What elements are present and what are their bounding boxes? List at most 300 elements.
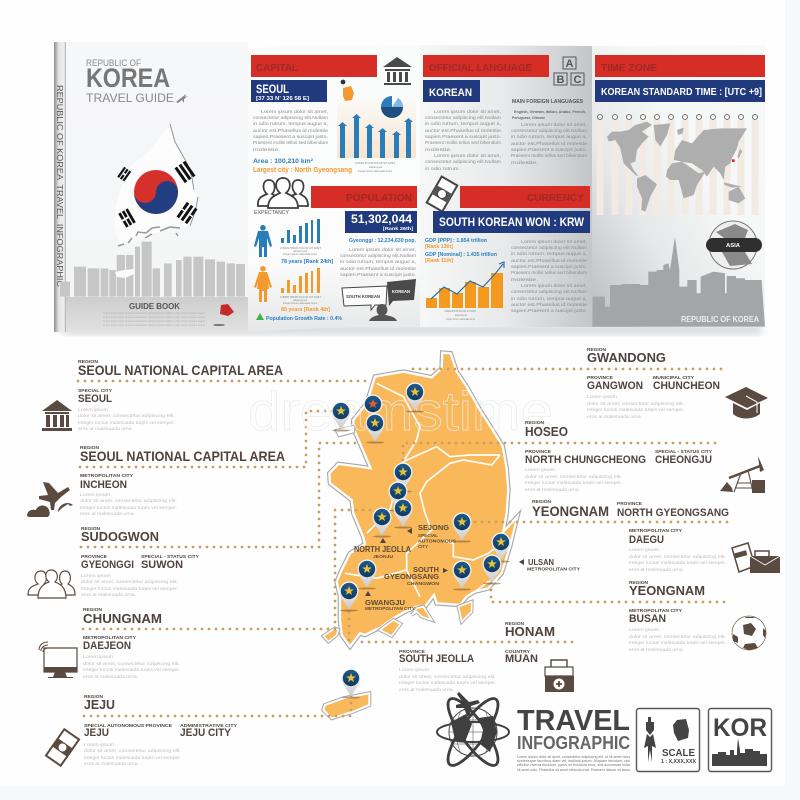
region heading: REGION (629, 580, 649, 586)
county heading: COUNTRY (505, 649, 531, 655)
capital facts: Area : 100,210 km² (253, 158, 314, 165)
Sejong label: CITY (418, 544, 429, 550)
icon: bank (42, 400, 72, 431)
province heading: SPECIAL AUTONOMOUS PROVINCE (84, 723, 173, 729)
book shadow (62, 326, 762, 334)
GDP figures: GDP [PPP] : 1.854 trillion (425, 238, 487, 244)
left column: Seoul capital area (78, 359, 283, 431)
icon: oil pump (720, 456, 765, 493)
orange chart caption (280, 295, 321, 305)
Gwangju label: METROPOLITAN CITY (365, 606, 415, 611)
right column: North Chungcheong (525, 420, 713, 492)
description: eros at malesuada urna. (525, 487, 580, 492)
region heading: REGION (81, 526, 101, 532)
currency paragraph: auctor est.Phasellus id molestie (511, 258, 588, 263)
capital name box (251, 80, 327, 102)
city heading: DAEJEON (83, 640, 131, 652)
page sheet (592, 45, 765, 327)
page: time zone (592, 45, 765, 327)
foreign language paragraph: in odio rutrum, tempus augue a, (511, 134, 587, 139)
Korea silhouette (673, 719, 689, 741)
spine (54, 42, 66, 332)
icon: airplane over clouds (27, 482, 73, 517)
female life expectancy (254, 266, 330, 313)
currency paragraph: sapien.Praesent a suscipit justo. (511, 264, 587, 269)
right column: Busan (629, 580, 726, 652)
GDP chart caption: LOREM IPSUM DOLOR SIT AMET (444, 309, 476, 313)
Sejong label: AUTONOMOUS (418, 538, 457, 544)
description (587, 394, 684, 419)
scale box (636, 708, 700, 772)
blue chart caption (280, 246, 321, 256)
guide book label: GUIDE BOOK (129, 302, 180, 311)
country footer label: REPUBLIC OF KOREA (681, 315, 759, 324)
city heading: BUSAN (629, 613, 666, 625)
province heading: PROVINCE (399, 649, 426, 655)
province heading: PROVINCE (587, 375, 614, 381)
cover title: TRAVEL GUIDE (86, 91, 174, 105)
foreign language paragraph: molestie. (511, 160, 538, 165)
description: Lorem ipsum (587, 394, 617, 399)
region heading: REGION (78, 359, 99, 365)
city heading: CHEONGJU (655, 454, 712, 466)
region heading: REGION (505, 621, 525, 627)
population paragraph: sapien.Praesent a suscipit justo. (340, 272, 416, 277)
GDP figures: GDP [Nominal] : 1.435 trillion (425, 252, 497, 258)
description (629, 627, 726, 652)
chart caption (355, 161, 395, 173)
foreign language paragraph: sapien.Praesent a suscipit justo. (511, 147, 587, 152)
province heading (587, 375, 643, 392)
city heading: SPECIAL - STATUS CITY (655, 449, 713, 455)
description: dolor sit amet, consectetur adipiscing elit. (399, 674, 496, 679)
male value: 78 years [Rank 24th] (281, 259, 333, 265)
description: Integer luctus malesuada turpis vel semper. (78, 420, 175, 425)
city heading (80, 473, 134, 491)
title small print: scelerisque faucibus diam vel, facilisis ipsum. Aliquam tincidunt, nisl (517, 759, 630, 763)
province heading: GANGWON (587, 380, 643, 392)
globe land (451, 714, 497, 752)
city heading: JEJU CITY (180, 727, 232, 739)
currency paragraph (511, 239, 588, 313)
province heading: SOUTH JEOLLA (399, 653, 474, 665)
foreign languages (512, 99, 586, 120)
icon: alphabet blocks: A (566, 58, 574, 70)
province heading: JEJU (84, 727, 109, 739)
province heading: PROVINCE (617, 501, 643, 507)
city heading: MUNICIPAL CITY (653, 375, 695, 381)
currency paragraph: auctor est.Phasellus id molestie (511, 302, 588, 307)
left column: Daejeon (83, 607, 180, 679)
capital paragraph: sapien.Praesent a suscipit justo. (253, 134, 328, 139)
spine title: REPUBLIC OF KOREA TRAVEL INFOGRAPHIC (55, 85, 65, 287)
capital paragraph: auctor est.Phasellus id molestie (253, 128, 329, 133)
bottom centre: South Jeolla (399, 649, 496, 692)
region heading: REGION (84, 694, 104, 700)
Gwangju label (365, 591, 415, 611)
travel infographic title: TRAVEL (517, 705, 630, 737)
province heading: PROVINCE (525, 449, 552, 455)
trend arrow (431, 264, 503, 299)
icon: compass (644, 717, 656, 762)
title small print (517, 755, 630, 772)
blue bars (281, 219, 320, 243)
city heading (141, 554, 200, 571)
foreign language paragraph: auctor est.Phasellus id molestie (511, 141, 588, 146)
GDP figures: [Rank 13th] (425, 244, 453, 250)
city heading: SUWON (141, 559, 183, 571)
language paragraph: consectetur adipiscing elit.Nullam (425, 115, 501, 120)
Asia label: ASIA (726, 243, 740, 249)
region heading: SEOUL NATIONAL CAPITAL AREA (80, 448, 285, 464)
time zone box (595, 80, 765, 102)
description: dolor sit amet, consectetur adipiscing elit. (629, 554, 726, 559)
travel infographic title: INFOGRAPHIC (517, 733, 630, 753)
currency paragraph: consectetur adipiscing elit.Nullam (511, 289, 587, 294)
city heading (655, 449, 713, 466)
description: Integer luctus malesuada turpis vel semper. (629, 640, 726, 645)
description (78, 407, 175, 431)
language paragraph: molestie. (425, 147, 452, 152)
description: eros at malesuada urna. (80, 511, 135, 516)
population paragraph: auctor est.Phasellus id molestie (340, 266, 417, 271)
region heading: REGION (83, 607, 103, 613)
city heading (629, 528, 683, 546)
North Jeolla label: JEONJU (373, 554, 393, 559)
book cover (54, 42, 248, 332)
cover small print (103, 311, 205, 327)
icon: orange person (254, 266, 272, 302)
province heading: NORTH GYEONGSANG (617, 507, 729, 519)
foreign languages: MAIN FOREIGN LANGUAGES (512, 99, 584, 105)
time zone box: KOREAN STANDARD TIME : [UTC +9] (601, 86, 762, 98)
plane (456, 692, 480, 716)
county heading: MUAN (505, 653, 538, 665)
icon: alphabet blocks: B (556, 74, 564, 86)
region heading: REGION (80, 445, 100, 451)
description: Integer luctus malesuada turpis vel semper. (525, 480, 622, 485)
icon: globe with orbiting planes (437, 692, 509, 772)
region heading: HONAM (505, 624, 555, 639)
bubble: korean: KOREAN (392, 289, 410, 294)
orange bars (281, 268, 320, 293)
South Gyeongsang label (384, 565, 448, 586)
Ulsan label: ULSAN (528, 558, 554, 567)
page sheet (248, 45, 420, 332)
city heading: METROPOLITAN CITY (80, 473, 134, 479)
chart caption: adipiscing elit (369, 165, 382, 169)
mini skyline (712, 738, 767, 766)
population value box (345, 211, 417, 233)
GDP chart caption (444, 309, 476, 321)
blue chart caption: adipiscing elit (293, 249, 307, 253)
time zone stripes (600, 120, 755, 215)
foreign language paragraph: Praesent mollis tellus sed bibendum (511, 153, 587, 158)
skyline (593, 237, 765, 327)
population value box: 51,302,044 (351, 212, 412, 226)
flag map of Korea (114, 124, 198, 246)
city heading (629, 608, 683, 625)
GDP chart caption: Integer luctus malesuada turpis (446, 317, 475, 321)
language paragraph: Praesent mollis tellus sed bibendum (425, 140, 501, 145)
travel infographic title (517, 705, 630, 772)
province heading: GYEONGGI (81, 559, 134, 571)
foreign language paragraph: Lorem ipsum dolor sit amet, (521, 122, 587, 127)
cover small print: Lorem ipsum dolor sit amet consectetur adipiscing elit nullam in odio rutrum tempus augue (103, 323, 205, 327)
language box (423, 80, 480, 102)
region heading: REGION (532, 499, 552, 505)
Sejong label (407, 523, 457, 550)
city heading (83, 635, 137, 652)
description: dolor sit amet, consectetur adipiscing elit. (83, 661, 180, 666)
capital paragraph: Lorem ipsum dolor sit amet, (261, 109, 328, 114)
city heading (78, 388, 113, 405)
trigrams (117, 161, 197, 228)
city heading: METROPOLITAN CITY (629, 608, 683, 614)
capital paragraph: Praesent mollis tellus sed bibendum (253, 140, 328, 145)
icon: blue person (254, 225, 272, 257)
icon: red location flag (213, 304, 234, 326)
city heading: METROPOLITAN CITY (83, 635, 137, 641)
currency box: SOUTH KOREAN WON : KRW (439, 215, 585, 229)
Ulsan label (519, 558, 581, 572)
description: Integer luctus malesuada turpis vel semper. (83, 667, 180, 672)
largest province: Gyeonggi : 12,234,630 pop. (349, 238, 416, 244)
left column: Incheon (80, 445, 285, 516)
population growth (256, 313, 342, 322)
capital pin with red star (364, 394, 382, 414)
cover title: REPUBLIC OF (86, 58, 141, 68)
city heading: CHUNCHEON (653, 380, 720, 392)
icon: banknote (46, 729, 79, 766)
description: dolor sit amet, consectetur adipiscing elit. (81, 579, 178, 584)
population paragraph: consectetur adipiscing elit.Nullam (340, 253, 416, 258)
region heading: CHUNGNAM (83, 611, 162, 626)
population header: POPULATION (346, 192, 412, 204)
mainland (329, 353, 517, 647)
North Jeolla label: NORTH JEOLLA (354, 545, 411, 554)
right column: Daegu (532, 499, 729, 572)
population growth: Population Growth Rate : 0.4% (266, 316, 342, 322)
title small print: Lorem ipsum dolor sit amet, consectetur adipiscing elit, ut sit amet risus (517, 755, 630, 759)
country code box: KOR (713, 714, 767, 742)
description: Integer luctus malesuada turpis vel semper. (399, 680, 496, 685)
description: Lorem ipsum (80, 492, 110, 497)
region heading: REGION (525, 420, 545, 426)
description (525, 467, 622, 492)
currency paragraph: consectetur adipiscing elit.Nullam (511, 245, 587, 250)
scale label: SCALE (662, 748, 695, 759)
city heading: ADMINISTRATIVE CITY (180, 723, 238, 729)
icon: people (28, 570, 75, 598)
language paragraph (425, 109, 502, 171)
page sheet (420, 45, 592, 327)
description: Integer luctus malesuada turpis vel semper. (80, 505, 177, 510)
province heading (617, 501, 729, 519)
region heading: GWANDONG (587, 350, 666, 365)
bottom centre: Muan (505, 621, 555, 665)
description: Integer luctus malesuada turpis vel semper. (81, 586, 178, 591)
capital paragraph (253, 109, 329, 152)
capital name box: [37 33 N' 126 58 E] (256, 96, 309, 102)
page: language and currency (420, 45, 592, 327)
province heading: NORTH CHUNGCHEONG (525, 454, 646, 466)
description: dolor sit amet, consectetur adipiscing elit. (84, 748, 181, 753)
globe land (716, 224, 752, 266)
GDP figures: [Rank 11th] (425, 258, 453, 264)
cover footer (66, 297, 248, 332)
province heading (84, 723, 173, 739)
province heading: PROVINCE (81, 554, 108, 560)
speech bubbles (342, 279, 416, 321)
scale box: 1 : X,XXX,XXX (661, 759, 697, 765)
Sejong label: SEJONG (418, 523, 449, 532)
cover small print: Lorem ipsum dolor sit amet consectetur adipiscing elit nullam in odio rutrum tempus augue (103, 311, 205, 315)
country code box (708, 708, 772, 772)
connector dotted lines (78, 369, 730, 716)
city heading: METROPOLITAN CITY (629, 528, 683, 534)
description: dolor sit amet, consectetur adipiscing elit. (587, 401, 684, 406)
South Gyeongsang label: SOUTH (413, 565, 439, 574)
currency paragraph: sapien.Praesent a suscipit justo. (511, 308, 587, 313)
currency header: CURRENCY (527, 192, 584, 204)
GDP figures (425, 238, 497, 264)
currency paragraph: in odio rutrum, tempus augue a, (511, 296, 587, 301)
description (629, 547, 726, 572)
city heading (653, 375, 720, 392)
description: Lorem ipsum (629, 547, 659, 552)
language paragraph: auctor est.Phasellus id molestie (425, 128, 502, 133)
icon: monitor with wifi (39, 642, 77, 678)
description: Lorem ipsum (84, 742, 114, 747)
currency paragraph: in odio rutrum, tempus augue a, (511, 251, 587, 256)
Gwangju label: GWANGJU (365, 598, 405, 607)
icon: alphabet blocks (554, 57, 584, 86)
globe grid (449, 708, 497, 756)
description: eros at malesuada urna. (399, 687, 454, 692)
population paragraph: Lorem ipsum dolor sit amet, (349, 247, 416, 252)
icon: people group (258, 178, 308, 208)
description: Lorem ipsum (525, 467, 555, 472)
foreign language paragraph (511, 122, 588, 165)
Jeju island (323, 693, 369, 718)
description: Lorem ipsum (629, 627, 659, 632)
taegeuk (134, 170, 178, 214)
capital facts (253, 158, 352, 174)
description: Integer luctus malesuada turpis vel semper. (587, 407, 684, 412)
description: eros at malesuada urna. (629, 647, 684, 652)
capital facts: Largest city : North Gyeongsang (253, 167, 352, 174)
icon: alphabet blocks: C (574, 74, 582, 86)
North Jeolla label (354, 538, 411, 559)
female value: 85 years [Rank 4th] (281, 307, 330, 313)
islands outline (118, 227, 180, 246)
description (84, 742, 181, 766)
Asia globe badge (706, 221, 762, 269)
currency paragraph: molestie. (511, 277, 538, 282)
map place labels (354, 523, 457, 611)
description (83, 654, 180, 679)
currency box (433, 211, 590, 233)
region heading: JEJU (84, 697, 115, 712)
world map (607, 122, 747, 212)
clocks row (598, 114, 758, 120)
language paragraph: in odio rutrum. (425, 166, 460, 171)
province heading (399, 649, 474, 665)
islands (323, 427, 472, 642)
city heading: SPECIAL - STATUS CITY (141, 554, 200, 560)
male life expectancy (254, 219, 333, 265)
description: Integer luctus malesuada turpis vel semper. (629, 560, 726, 565)
description: Integer luctus malesuada turpis vel semper. (84, 755, 181, 760)
orange chart caption: adipiscing elit (293, 298, 307, 302)
description: eros at malesuada urna. (83, 674, 138, 679)
white island (115, 269, 134, 278)
description (399, 667, 496, 692)
currency paragraph: Praesent mollis tellus sed bibendum (511, 270, 587, 275)
province heading (525, 449, 646, 466)
city heading: SPECIAL CITY (78, 388, 113, 394)
cover title (86, 58, 174, 105)
icon: bank building (383, 57, 412, 85)
currency header (460, 186, 590, 208)
description (81, 573, 178, 597)
orbits (437, 692, 509, 772)
capital paragraph: molestie. (253, 147, 280, 152)
description: dolor sit amet, consectetur adipiscing elit. (629, 634, 726, 639)
language paragraph: in odio rutrum, tempus augue a, (425, 121, 501, 126)
language box: KOREAN (429, 87, 472, 99)
blue chart caption: Integer luctus malesuada turpis (283, 252, 317, 256)
province borders (345, 383, 502, 597)
icon: documents and briefcase (732, 543, 780, 573)
left column: Gyeonggi (81, 526, 200, 597)
icon: graduation cap (725, 387, 768, 418)
Korea marker (732, 159, 735, 162)
icon: banknote (427, 177, 457, 211)
description: dolor sit amet, consectetur adipiscing elit. (78, 413, 175, 418)
language paragraph: consectetur adipiscing elit.Nullam (425, 159, 501, 164)
bars (426, 273, 503, 308)
Sejong label: SPECIAL (418, 533, 438, 539)
capital header (251, 55, 377, 77)
population value box: [Rank 26th] (383, 226, 413, 232)
currency paragraph: Lorem ipsum dolor sit amet, (521, 283, 587, 288)
description: Lorem ipsum (399, 667, 429, 672)
population header (311, 186, 417, 208)
city heading: INCHEON (80, 479, 127, 491)
language paragraph: sapien.Praesent a suscipit justo. (425, 134, 501, 139)
foreign language paragraph: consectetur adipiscing elit.Nullam (511, 128, 587, 133)
capital paragraph: in odio rutrum, tempus augue a, (253, 121, 328, 126)
bars (338, 114, 413, 158)
left column: Jeju (84, 694, 238, 766)
description: Lorem ipsum (78, 407, 108, 412)
region heading: SEOUL NATIONAL CAPITAL AREA (78, 362, 283, 378)
capital chart (337, 80, 416, 158)
capital paragraph: consectetur adipiscing elit.Nullam (253, 115, 328, 120)
province heading (81, 554, 134, 571)
description: eros at malesuada urna. (629, 567, 684, 572)
description: Lorem ipsum (81, 573, 111, 578)
cover small print: Lorem ipsum dolor sit amet consectetur adipiscing elit nullam in odio rutrum tempus augue (103, 315, 205, 319)
bubble: south korean: SOUTH KOREAN (346, 294, 381, 299)
city heading: DAEGU (629, 534, 664, 546)
title small print: efficitur viverra tincidunt, purus mi tincidunt eros, sed accumsan nulla (517, 763, 630, 767)
region heading: YEONGNAM (532, 503, 609, 519)
region heading: SUDOGWON (81, 529, 159, 544)
region heading: YEONGNAM (629, 583, 705, 598)
